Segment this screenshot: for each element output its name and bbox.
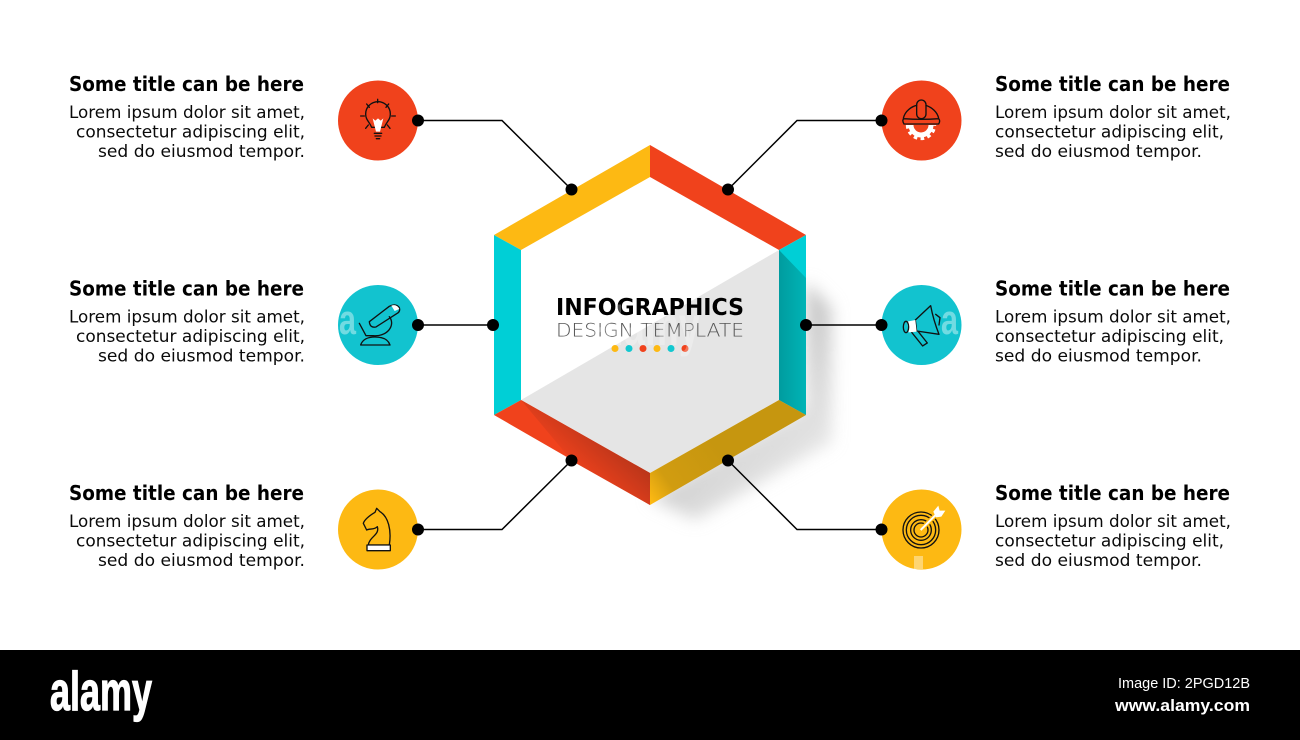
text block: middle right: sed do eiusmod tempor. <box>995 346 1202 366</box>
icon: chess knight <box>363 508 390 551</box>
footer image id: Image ID: 2PGD12B <box>1118 676 1250 692</box>
text block: top left: sed do eiusmod tempor. <box>98 142 305 161</box>
icon badge: chess knight <box>338 490 424 570</box>
heading: infographics: INFOGRAPHICS <box>556 293 744 321</box>
footer website: www.alamy.com <box>1114 696 1250 715</box>
icon: megaphone <box>903 306 940 346</box>
text block: bottom right <box>995 481 1231 570</box>
icon badge: light bulb <box>338 80 424 160</box>
text block: bottom right: sed do eiusmod tempor. <box>995 551 1202 570</box>
text block: middle left: consectetur adipiscing elit, <box>76 327 305 346</box>
text block: middle left: Lorem ipsum dolor sit amet, <box>69 308 305 326</box>
center title <box>556 293 744 352</box>
watermark letter <box>914 556 923 569</box>
text block: top left: Some title can be here <box>69 72 304 96</box>
footer bar <box>0 650 1300 740</box>
hexagon segment: bottom left <box>494 400 650 505</box>
text block: middle right: consectetur adipiscing elit, <box>995 327 1224 346</box>
long shadow of hexagon <box>650 282 832 520</box>
text block: top left: consectetur adipiscing elit, <box>76 122 305 142</box>
text block: top right: Lorem ipsum dolor sit amet, <box>995 103 1231 122</box>
watermark over center: alamy <box>592 294 700 357</box>
icon badge: microscope <box>338 285 424 365</box>
connector: top right <box>728 120 882 190</box>
watermark letter: a <box>339 296 356 343</box>
text block: middle right <box>995 276 1231 366</box>
central hexagon <box>494 145 806 505</box>
hexagon segment: top right <box>650 145 806 250</box>
text block: top right: consectetur adipiscing elit, <box>995 122 1224 142</box>
footer logo: alamy <box>50 660 152 722</box>
text block: bottom left: Some title can be here <box>69 481 304 505</box>
text block: top right: sed do eiusmod tempor. <box>995 142 1202 161</box>
connector: bottom right <box>728 460 882 530</box>
icon: target <box>903 506 945 548</box>
text block: bottom right: Some title can be here <box>995 481 1230 505</box>
hexagon segment: right <box>779 235 806 415</box>
hexagon segment: top left <box>494 145 650 250</box>
text block: top left <box>69 72 305 161</box>
text block: bottom left: consectetur adipiscing elit, <box>76 532 305 550</box>
connector: bottom left <box>418 460 572 530</box>
hexagon inner shadow <box>521 250 779 473</box>
icon: light bulb <box>361 99 395 139</box>
text block: top right <box>995 72 1231 161</box>
text block: bottom right: consectetur adipiscing elit, <box>995 532 1224 550</box>
connector dots on hexagon <box>487 184 812 466</box>
text block: middle right: Lorem ipsum dolor sit amet, <box>995 308 1231 326</box>
text block: middle left: Some title can be here <box>69 276 304 300</box>
text block: bottom left <box>69 481 305 570</box>
colored dots <box>612 345 688 352</box>
connector: middle left <box>418 324 493 326</box>
hexagon inner face <box>521 177 779 473</box>
icon badge: megaphone <box>876 285 962 365</box>
icon badge: target <box>876 490 962 570</box>
connector: middle right <box>806 324 882 326</box>
text block: top left: Lorem ipsum dolor sit amet, <box>69 103 305 122</box>
text block: top right: Some title can be here <box>995 72 1230 96</box>
text block: bottom right: Lorem ipsum dolor sit amet, <box>995 512 1231 531</box>
icon: microscope <box>359 305 400 345</box>
watermark letter: a <box>941 296 958 343</box>
text block: bottom left: sed do eiusmod tempor. <box>98 551 305 570</box>
text block: middle left: sed do eiusmod tempor. <box>98 346 305 366</box>
icon badge: helmet and gear <box>876 80 962 160</box>
text block: middle right: Some title can be here <box>995 276 1230 300</box>
subheading: design template: DESIGN TEMPLATE <box>556 320 744 342</box>
text block: middle left <box>69 276 305 366</box>
hexagon segment: bottom right <box>650 400 806 505</box>
hexagon segment: left <box>494 235 521 415</box>
icon: helmet and gear <box>903 100 940 139</box>
text block: bottom left: Lorem ipsum dolor sit amet, <box>69 512 305 531</box>
connector: top left <box>418 120 572 190</box>
